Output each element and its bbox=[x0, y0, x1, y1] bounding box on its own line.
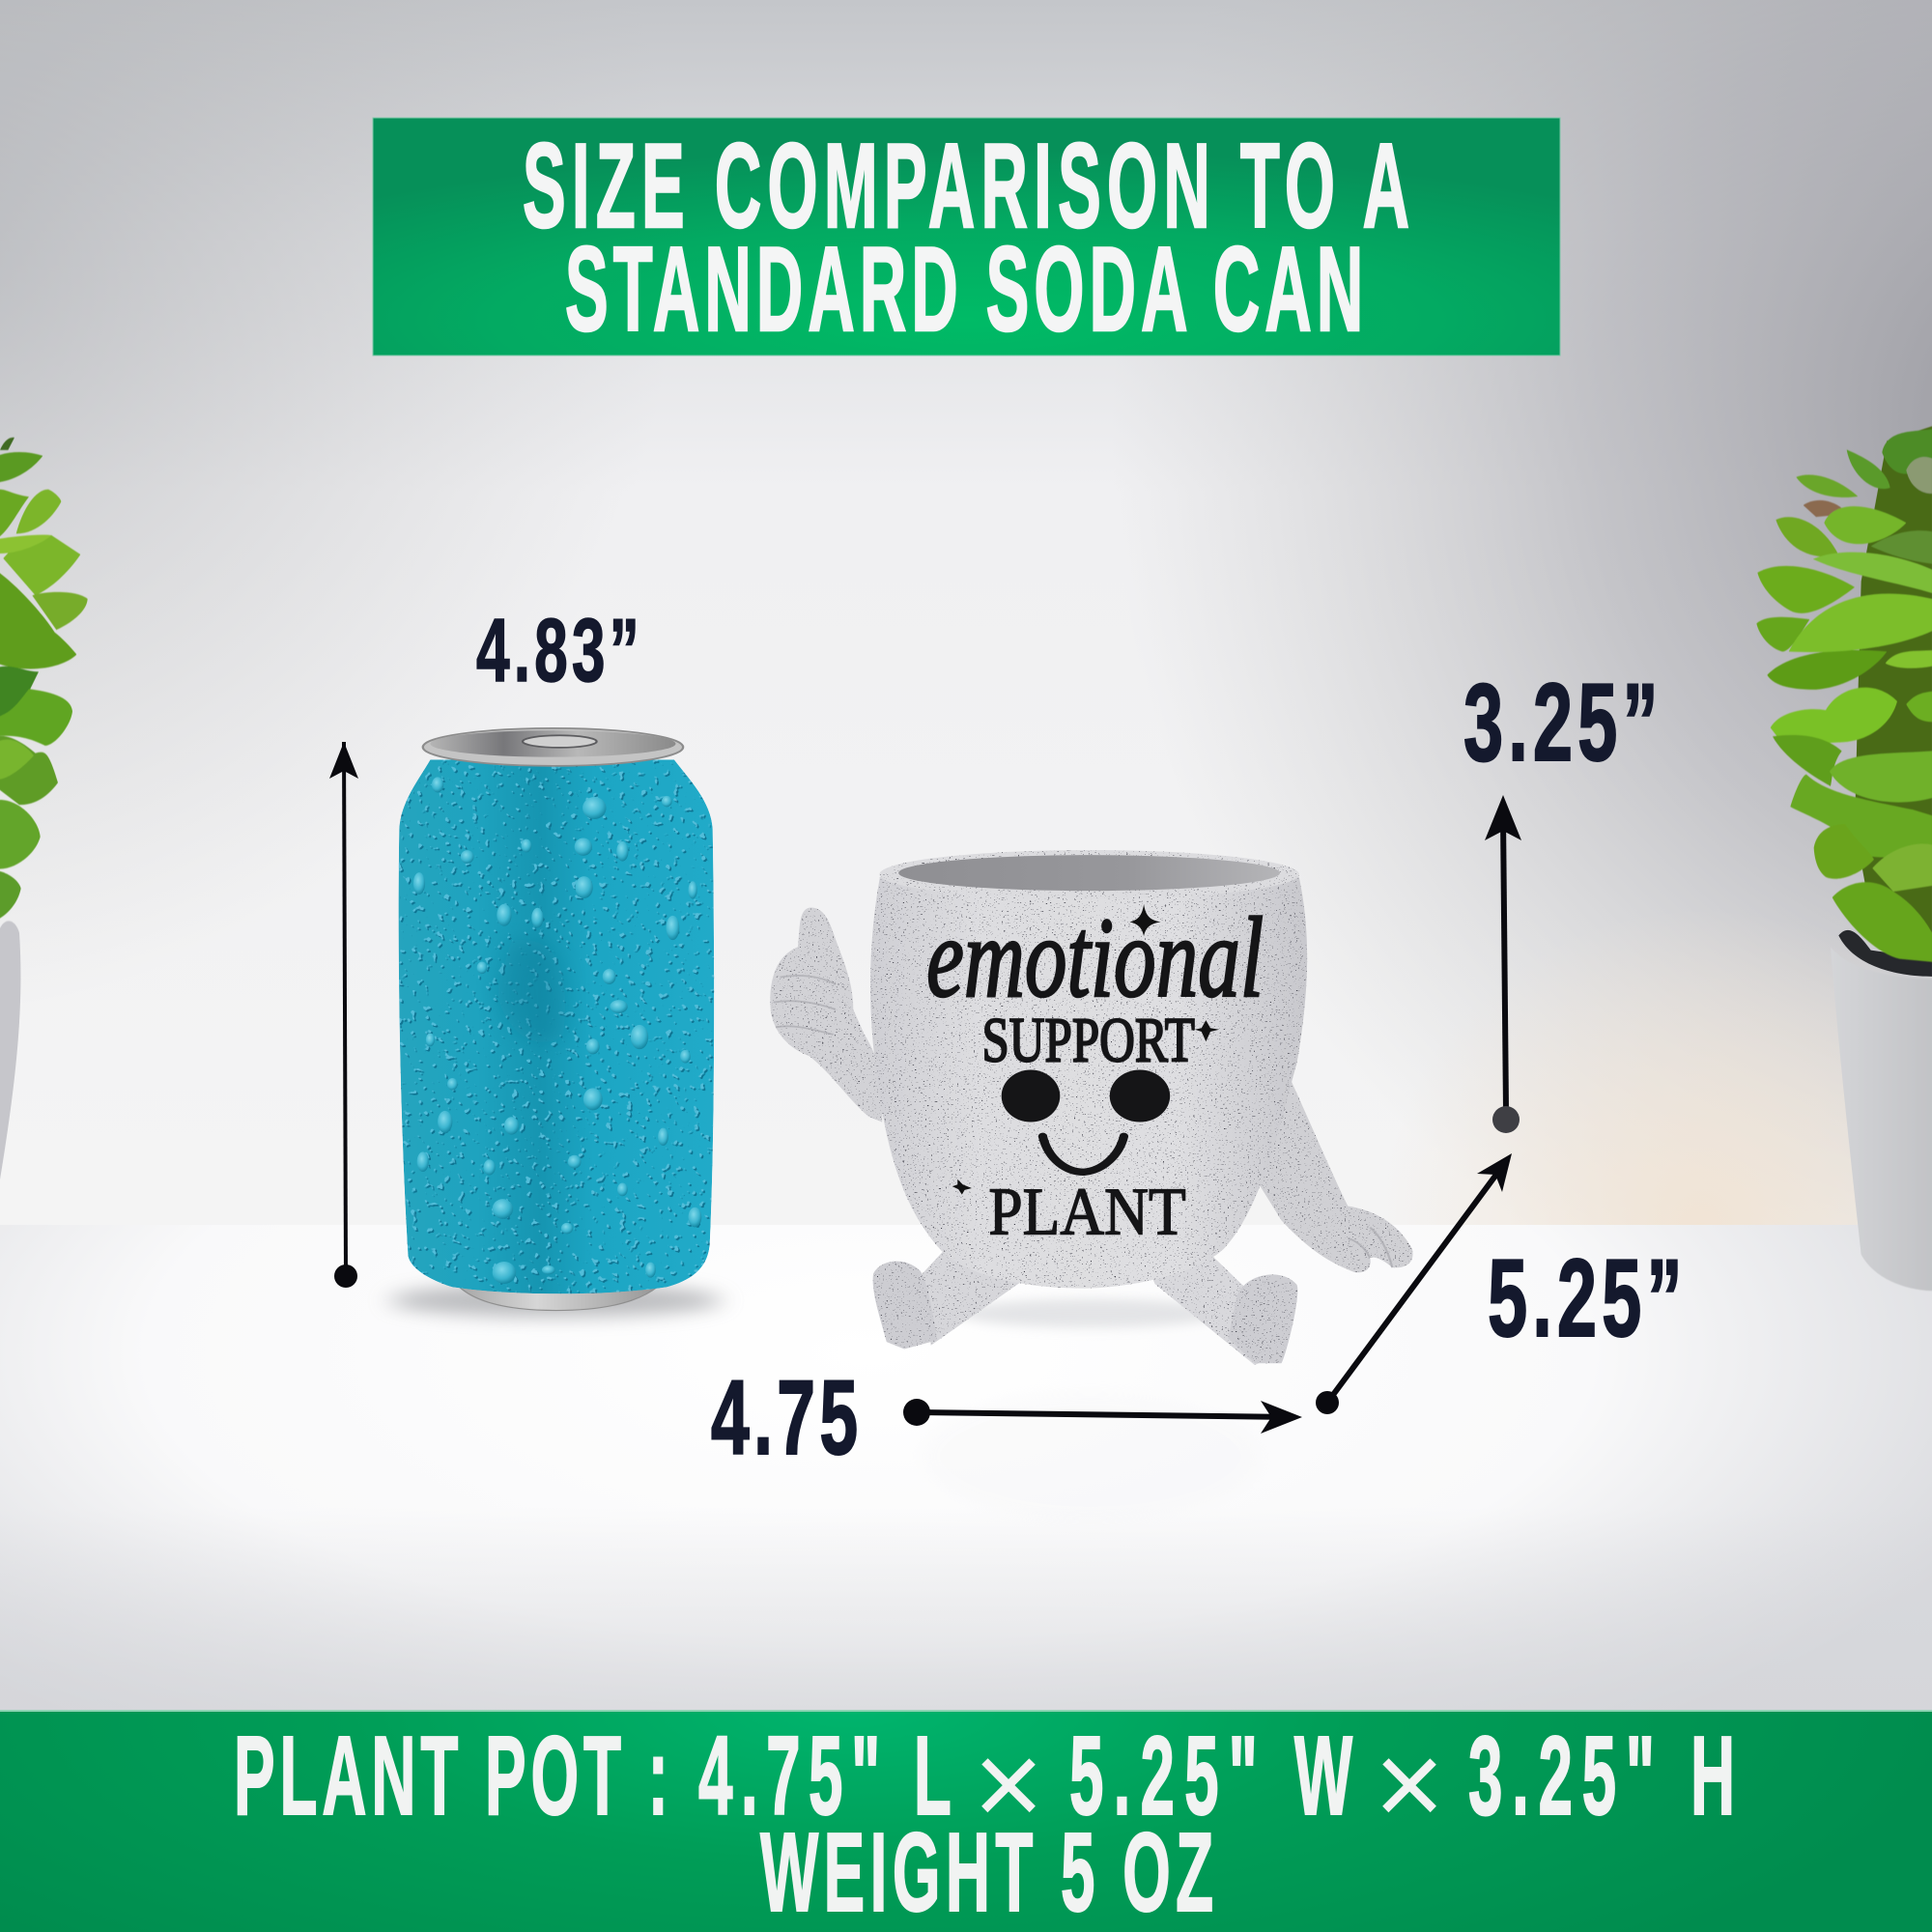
soda can bbox=[389, 728, 723, 1317]
footer text: × bbox=[1374, 1718, 1445, 1852]
can body bbox=[399, 760, 714, 1293]
label: can height: 4.83” bbox=[476, 599, 639, 700]
left plant bbox=[0, 438, 88, 1179]
left foot bbox=[873, 1262, 938, 1349]
footer text: 5.25" W bbox=[1069, 1713, 1353, 1838]
label: pot height: 3.25” bbox=[1463, 662, 1659, 784]
can lid bbox=[423, 728, 683, 766]
footer text: WEIGHT 5 OZ bbox=[760, 1809, 1213, 1932]
footer text: 3.25" H bbox=[1468, 1713, 1735, 1838]
pot opening bbox=[898, 855, 1280, 891]
right plant bbox=[1756, 426, 1932, 1291]
right arm bbox=[1250, 1060, 1413, 1272]
left eye bbox=[1002, 1070, 1060, 1122]
pot floor shadow bbox=[957, 1299, 1224, 1327]
smile bbox=[1042, 1136, 1123, 1172]
pot lettering bbox=[926, 894, 1264, 1249]
left leg bbox=[922, 1245, 1020, 1346]
floor surface bbox=[0, 1225, 1932, 1718]
heading text bbox=[523, 120, 1409, 356]
heading text: SIZE COMPARISON TO A bbox=[523, 120, 1409, 253]
thumb finger lines bbox=[774, 976, 1392, 1267]
footer text: PLANT POT : bbox=[234, 1713, 668, 1838]
sparkle right bbox=[1195, 1020, 1219, 1041]
emotional support plant pot bbox=[770, 850, 1413, 1520]
label: pot depth: 5.25” bbox=[1488, 1237, 1683, 1360]
right plant soil bbox=[1838, 930, 1932, 977]
left plant pot bbox=[0, 921, 20, 1179]
header banner bbox=[373, 118, 1560, 356]
background wall bbox=[0, 0, 1932, 1227]
pot floor reflection bbox=[922, 1392, 1259, 1520]
left plant leaves bbox=[0, 438, 88, 919]
sparkle top bbox=[1129, 904, 1161, 936]
footer text: × bbox=[974, 1718, 1043, 1852]
right leg bbox=[1144, 1245, 1281, 1365]
height arrow for can bbox=[329, 742, 358, 1288]
pot body bbox=[870, 877, 1307, 1289]
right plant pot bbox=[1831, 948, 1932, 1291]
height arrow for pot bbox=[1485, 795, 1521, 1133]
right plant leaves bbox=[1756, 426, 1932, 962]
thumb arm bbox=[770, 908, 883, 1122]
footer banner bbox=[0, 1710, 1932, 1932]
label: pot width: 4.75 bbox=[711, 1357, 858, 1477]
pot rim bbox=[879, 850, 1299, 898]
can base bbox=[446, 1267, 672, 1311]
depth arrow bbox=[1316, 1153, 1512, 1414]
speckled pot shapes bbox=[770, 850, 1413, 1365]
can droplets bbox=[413, 777, 701, 1284]
right eye bbox=[1110, 1070, 1170, 1122]
footer text: 4.75" L bbox=[698, 1713, 952, 1838]
right foot bbox=[1228, 1274, 1297, 1363]
text: emotional: emotional bbox=[926, 894, 1264, 1021]
can dark band bbox=[497, 939, 565, 1043]
text: plant: PLANT bbox=[988, 1174, 1186, 1249]
footer text bbox=[234, 1713, 1735, 1932]
heading text: STANDARD SODA CAN bbox=[565, 223, 1363, 356]
width arrow bbox=[903, 1399, 1302, 1434]
sparkle lower bbox=[952, 1179, 972, 1195]
can shadow bbox=[389, 1284, 723, 1317]
text: support: SUPPORT bbox=[981, 1006, 1195, 1076]
